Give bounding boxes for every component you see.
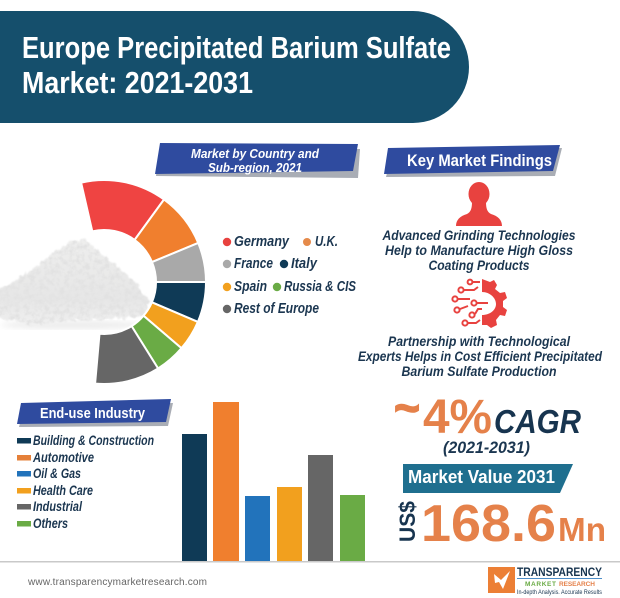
bar legend bbox=[17, 433, 154, 531]
market value band: Market Value 2031 bbox=[408, 467, 555, 487]
finding one: Coating Products bbox=[428, 257, 530, 273]
heading: key market findings: Key Market Findings bbox=[407, 152, 552, 170]
donut legend: Spain bbox=[234, 279, 267, 295]
donut legend: Italy bbox=[291, 256, 318, 272]
CAGR stat: (2021-2031) bbox=[443, 438, 530, 457]
market value figure: 168.6 bbox=[421, 495, 556, 553]
website url: www.transparencymarketresearch.com bbox=[27, 577, 207, 588]
segment: Italy bbox=[152, 282, 206, 322]
segment: Spain bbox=[144, 302, 198, 348]
CAGR stat bbox=[394, 382, 581, 457]
bar chart bbox=[182, 402, 365, 562]
CAGR stat: 4% bbox=[423, 391, 492, 444]
donut legend: Rest of Europe bbox=[234, 301, 319, 317]
CAGR stat: CAGR bbox=[494, 403, 581, 440]
logo: MARKET bbox=[525, 581, 556, 588]
title: Market: 2021-2031 bbox=[22, 65, 253, 100]
donut legend: Russia & CIS bbox=[284, 279, 356, 295]
title banner bbox=[0, 11, 469, 123]
donut legend bbox=[223, 234, 356, 317]
bar legend: Health Care bbox=[33, 483, 93, 498]
logo bbox=[488, 565, 602, 596]
heading: market by country: Sub-region, 2021 bbox=[208, 161, 302, 175]
title bbox=[22, 30, 451, 100]
bar legend: Automotive bbox=[32, 450, 94, 465]
icon: person bbox=[456, 182, 502, 226]
icon: circuit gear bbox=[452, 279, 507, 328]
segment: Germany bbox=[81, 180, 164, 240]
logo: RESEARCH bbox=[559, 581, 595, 588]
segment: U.K. bbox=[135, 200, 198, 262]
donut legend: France bbox=[234, 256, 273, 272]
segment: Russia & CIS bbox=[132, 316, 182, 368]
finding two: Barium Sulfate Production bbox=[402, 363, 556, 379]
bar legend: Oil & Gas bbox=[33, 466, 81, 481]
heading: market by country bbox=[155, 143, 360, 178]
donut legend: Germany bbox=[234, 234, 290, 250]
market value figure: Mn bbox=[558, 511, 606, 548]
logo: TRANSPARENCY bbox=[517, 565, 602, 579]
finding two bbox=[358, 333, 602, 379]
donut chart bbox=[81, 180, 206, 384]
bar legend: Others bbox=[33, 516, 68, 531]
heading: end-use industry bbox=[17, 399, 173, 427]
finding one: Advanced Grinding Technologies bbox=[382, 227, 576, 243]
donut legend: U.K. bbox=[315, 234, 338, 250]
segment: France bbox=[152, 243, 206, 282]
finding two: Partnership with Technological bbox=[388, 333, 571, 349]
CAGR stat: ~ bbox=[394, 382, 420, 435]
logo: In-depth Analysis. Accurate Results bbox=[517, 590, 602, 596]
market value figure: US$ bbox=[395, 501, 420, 542]
bar legend: Building & Construction bbox=[33, 433, 154, 448]
title: Europe Precipitated Barium Sulfate bbox=[22, 30, 451, 65]
segment: Rest of Europe bbox=[95, 326, 158, 384]
finding one bbox=[382, 227, 576, 273]
finding one: Help to Manufacture High Gloss bbox=[385, 242, 573, 258]
market value band bbox=[403, 464, 573, 493]
icon: powder pile bbox=[0, 239, 149, 329]
market value figure bbox=[395, 495, 606, 553]
bar legend: Industrial bbox=[33, 499, 82, 514]
heading: key market findings bbox=[384, 145, 562, 177]
heading: end-use industry: End-use Industry bbox=[40, 405, 146, 422]
heading: market by country: Market by Country and bbox=[191, 147, 319, 161]
